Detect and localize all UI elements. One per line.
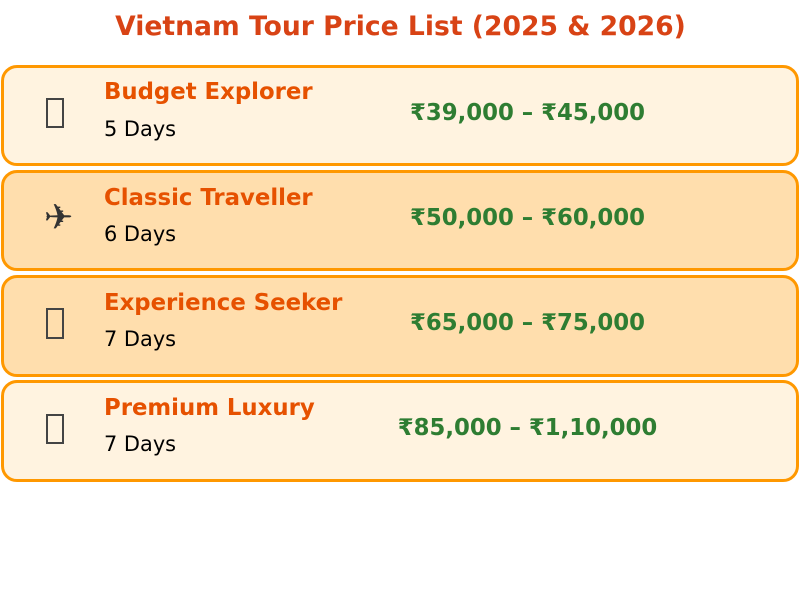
- icon: airplane: ✈: [44, 198, 73, 238]
- duration: 7 Days: 7 Days: [104, 327, 176, 351]
- duration: 5 Days: 5 Days: [104, 117, 176, 141]
- panel: Experience Seeker: [1, 275, 799, 377]
- icon: missing-glyph box: [46, 98, 64, 128]
- price: Experience Seeker: ₹65,000 – ₹75,000: [410, 310, 645, 336]
- name: Classic Traveller: Classic Traveller: [104, 185, 313, 211]
- title: Vietnam Tour Price List (2025 & 2026): [115, 11, 686, 42]
- price: Premium Luxury: ₹85,000 – ₹1,10,000: [398, 415, 657, 441]
- icon: missing-glyph box: [46, 308, 64, 339]
- panel: Premium Luxury: [1, 380, 799, 482]
- duration: 7 Days: 7 Days: [104, 432, 176, 456]
- name: Experience Seeker: Experience Seeker: [104, 290, 342, 316]
- panel: Classic Traveller: [1, 170, 799, 271]
- duration: 6 Days: 6 Days: [104, 222, 176, 246]
- name: Budget Explorer: Budget Explorer: [104, 79, 313, 105]
- icon: missing-glyph box: [46, 414, 64, 444]
- price: Budget Explorer: ₹39,000 – ₹45,000: [410, 100, 645, 126]
- panel: Budget Explorer: [1, 65, 799, 166]
- name: Premium Luxury: Premium Luxury: [104, 395, 315, 421]
- price: Classic Traveller: ₹50,000 – ₹60,000: [410, 205, 645, 231]
